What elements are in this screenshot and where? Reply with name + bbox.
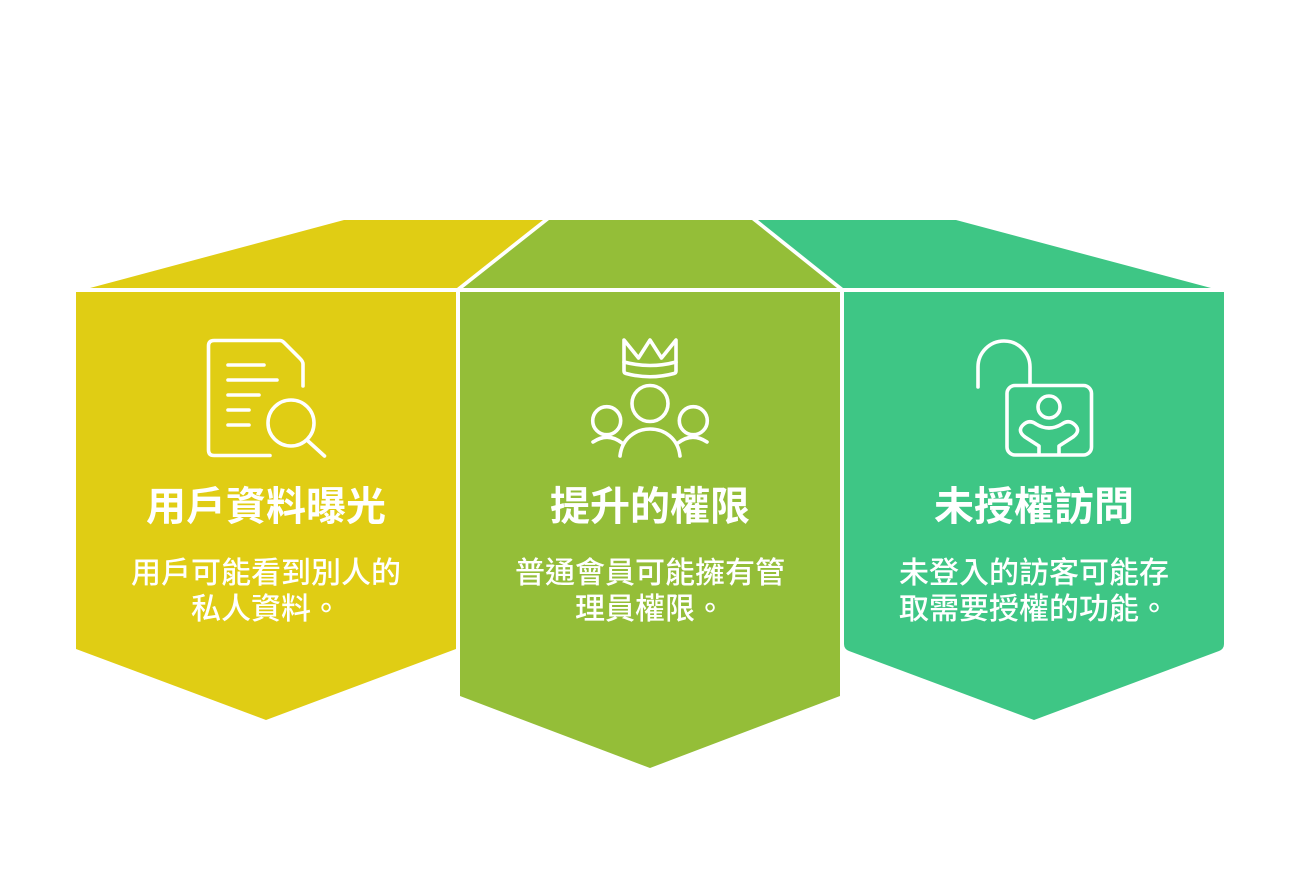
heading: unauthorized access: 未授權訪問 xyxy=(934,485,1134,529)
description: unauthorized access: 未登入的訪客可能存 xyxy=(899,557,1169,590)
description: unauthorized access: 取需要授權的功能。 xyxy=(899,593,1169,626)
icon: open padlock with person xyxy=(978,341,1092,455)
body: teal xyxy=(844,292,1224,720)
heading: user data exposure: 用戶資料曝光 xyxy=(146,485,386,529)
icon: document with magnifier xyxy=(208,340,324,456)
description: user data exposure: 用戶可能看到別人的 xyxy=(131,557,401,590)
roof: teal xyxy=(758,220,1211,288)
panel: unauthorized access xyxy=(758,220,1224,720)
body: yellow xyxy=(76,292,456,720)
panel: elevated privileges xyxy=(460,220,840,768)
roof: green xyxy=(463,220,837,288)
body: green xyxy=(460,292,840,768)
panel: user data exposure xyxy=(76,220,543,720)
description: elevated privileges: 普通會員可能擁有管 xyxy=(515,557,785,590)
heading: elevated privileges: 提升的權限 xyxy=(550,485,750,529)
icon: crown above group of people xyxy=(593,340,707,456)
description: elevated privileges: 理員權限。 xyxy=(575,593,725,626)
roof: yellow xyxy=(90,220,543,288)
description: user data exposure: 私人資料。 xyxy=(191,593,341,626)
